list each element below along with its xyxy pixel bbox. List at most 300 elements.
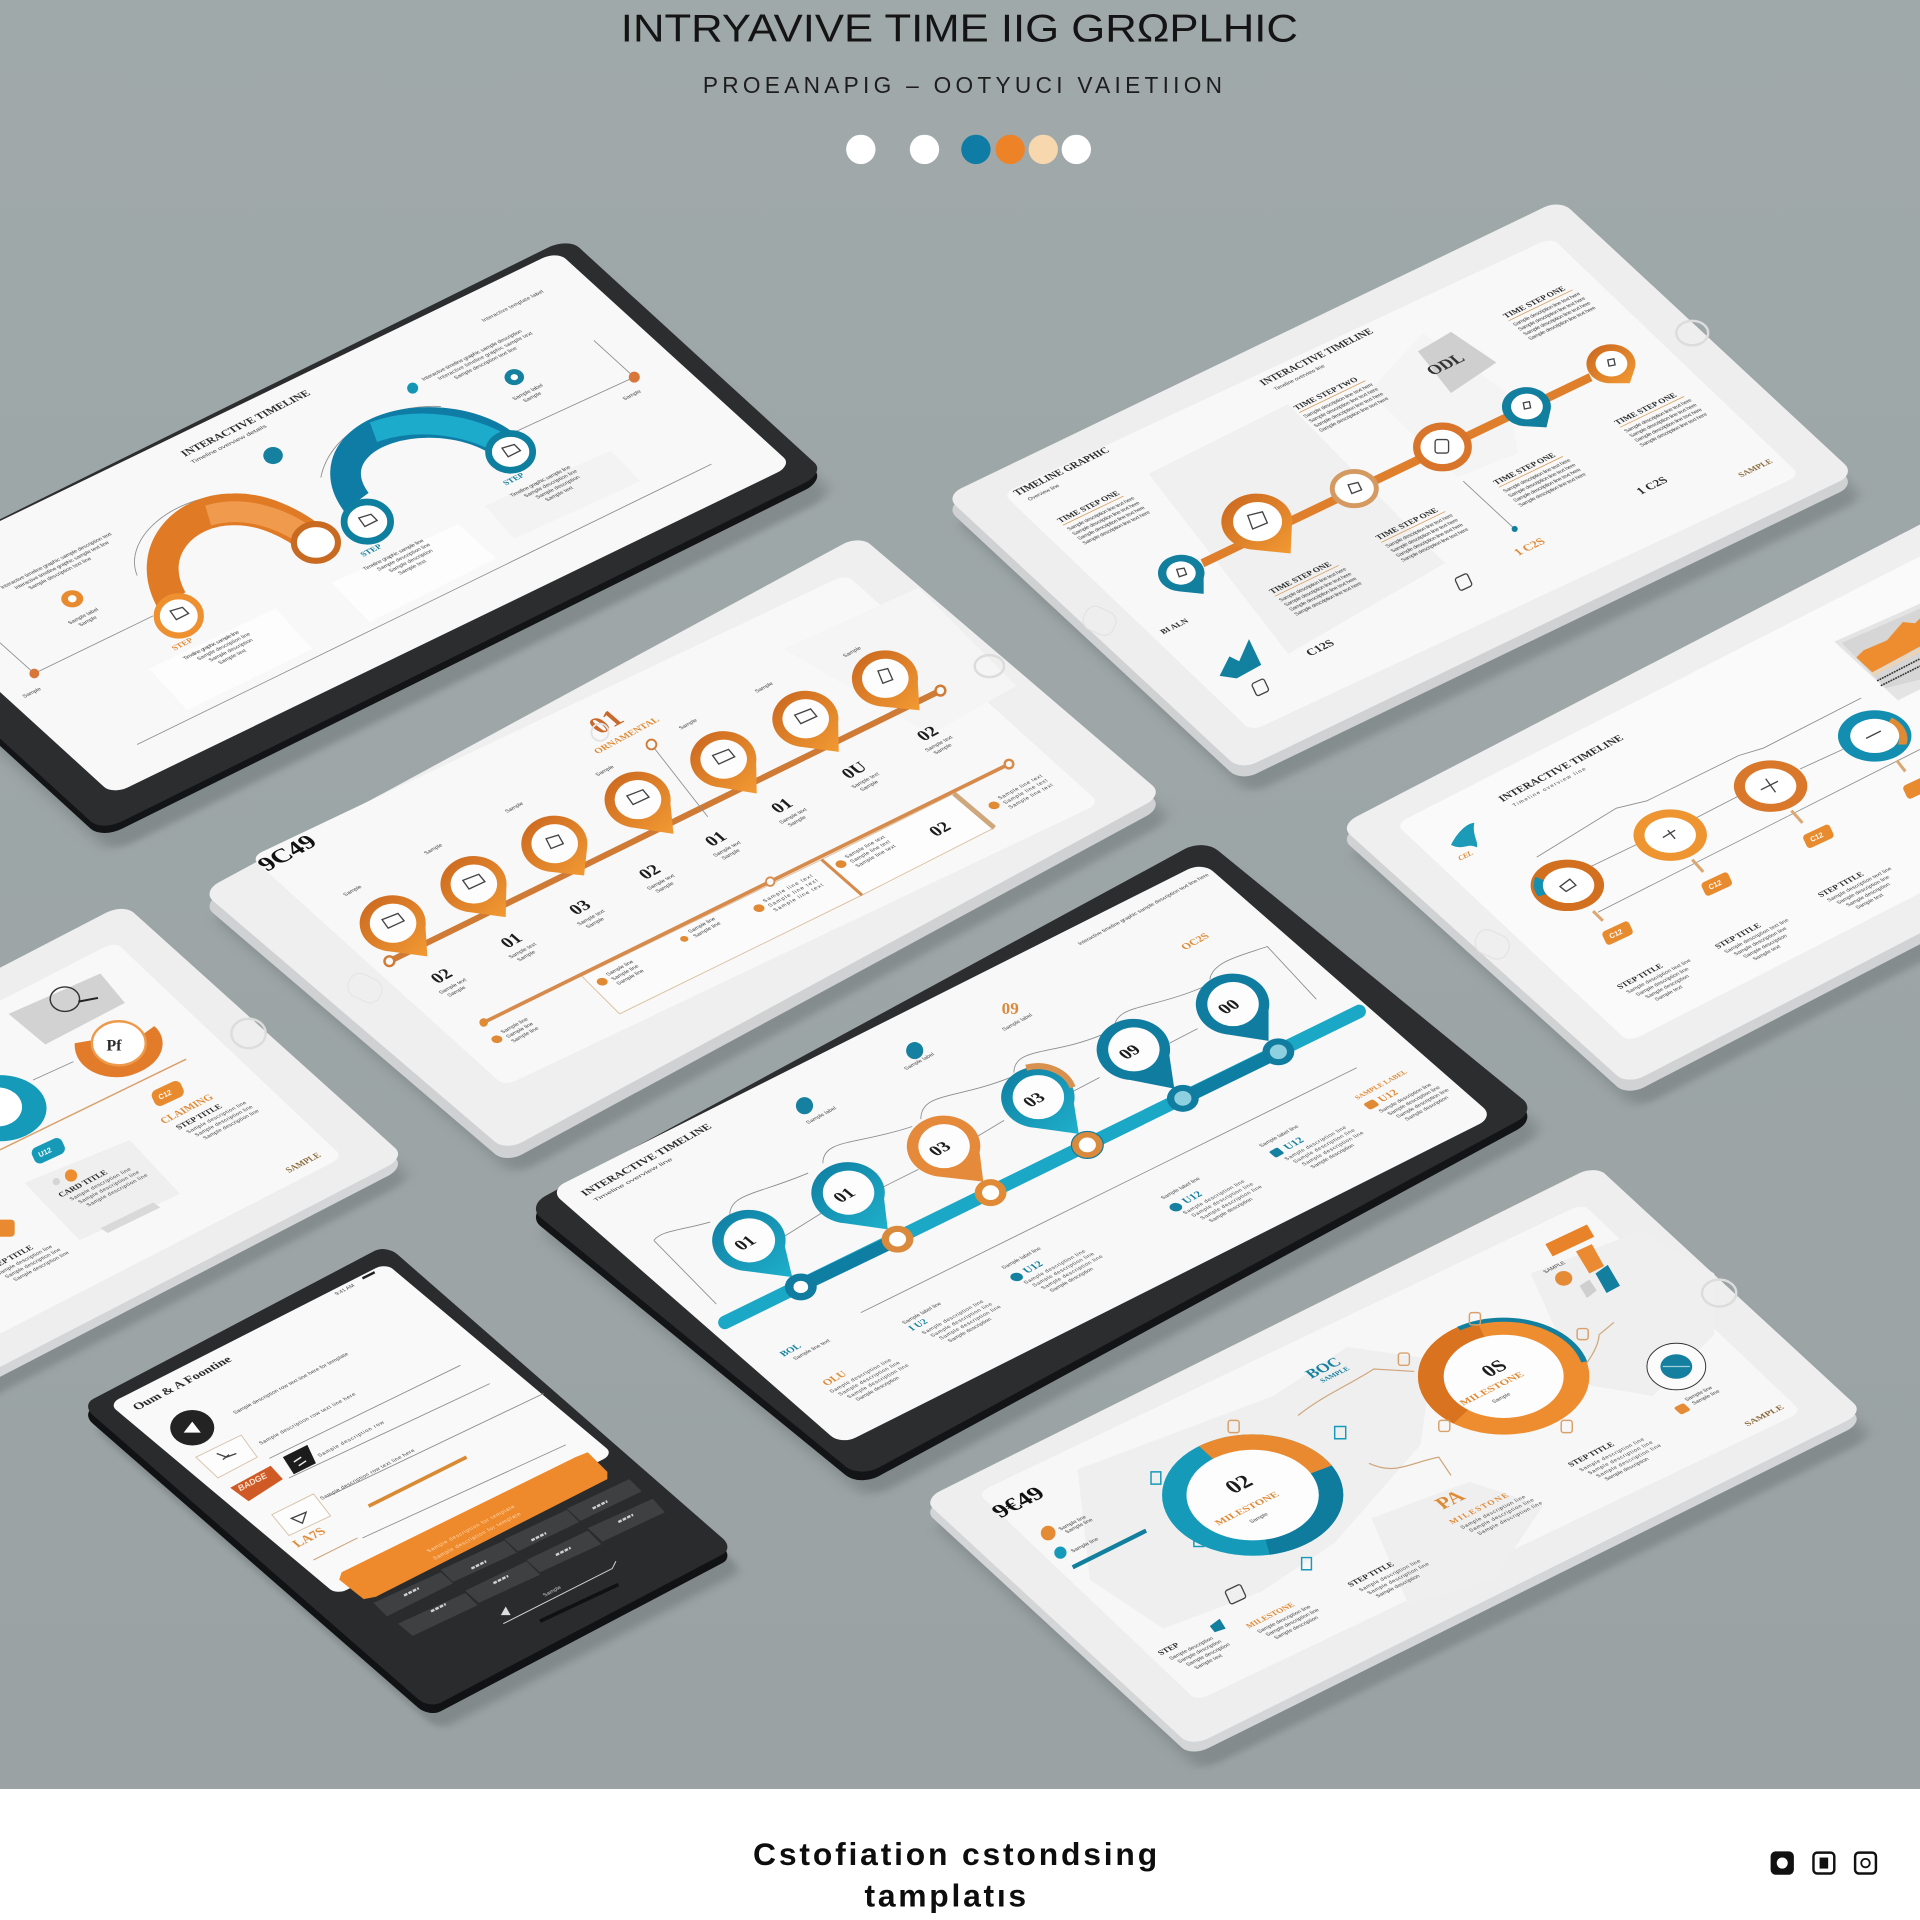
avatar <box>170 1410 214 1446</box>
captions: Sample <box>342 885 364 898</box>
teal icon <box>1451 823 1477 863</box>
box notes: Sample line text <box>849 839 893 864</box>
step numbers: 01 <box>700 828 731 849</box>
orange ring <box>75 1021 163 1077</box>
text blocks: PA <box>1431 1487 1470 1513</box>
text blocks: Sample description <box>1404 1096 1450 1122</box>
box notes: Sample line <box>692 921 723 939</box>
text blocks: Sample text <box>1654 985 1685 1002</box>
text blocks: Sample description <box>1049 1267 1095 1293</box>
orange icon and text: Sample description line <box>4 1248 63 1280</box>
orange progress line <box>369 1457 467 1506</box>
text blocks: Sample line <box>1684 1386 1714 1403</box>
text blocks: TIME STEP ONE <box>1501 285 1568 320</box>
subtitle: PROEANAPIG – OOTYUCI VAIETIION <box>703 72 1222 98</box>
text blocks: Sample description line text here <box>1507 463 1578 499</box>
text blocks: Sample description line text here <box>1066 496 1137 532</box>
captions: Sample text <box>924 735 955 753</box>
text blocks: Sample description line text here <box>1502 458 1572 494</box>
box notes: Sample line text <box>762 874 815 904</box>
teal arc <box>321 406 533 541</box>
heading: INTERACTIVE TIMELINE <box>178 388 313 459</box>
row text: Sample description row text line here <box>319 1448 417 1501</box>
footer caption <box>753 1836 1157 1914</box>
text blocks: Sample description <box>1644 974 1691 1000</box>
box notes: Sample line text <box>772 883 826 913</box>
list icons: LA7S <box>289 1525 329 1550</box>
emblem and title: 01 <box>582 705 631 739</box>
keyboard <box>373 1479 665 1636</box>
text blocks: Sample <box>622 389 643 402</box>
left list <box>1041 1514 1146 1567</box>
panel: centre dark tablet with teal pins <box>527 839 1547 1500</box>
captions: Sample <box>446 985 468 998</box>
text blocks: STEP <box>1156 1641 1181 1657</box>
step numbers: 01 <box>496 930 527 951</box>
orange icon and text <box>0 1220 71 1287</box>
box notes: Sample line <box>500 1017 530 1035</box>
box notes: Sample line text <box>767 878 820 908</box>
text blocks: Sample description text line <box>1625 958 1693 995</box>
text blocks: STEP TITLE <box>1346 1560 1396 1588</box>
step numbers: 02 <box>912 723 943 744</box>
text blocks: TIME STEP ONE <box>1267 560 1334 595</box>
text blocks: Sample description line <box>1587 1440 1655 1476</box>
phone title: Oum & A Foontine <box>129 1354 235 1413</box>
text blocks: Sample description line <box>1023 1249 1088 1286</box>
text blocks <box>778 1062 1456 1408</box>
text blocks: SAMPLE LABEL <box>1353 1069 1409 1101</box>
text blocks: Sample description line <box>846 1363 911 1400</box>
faint map <box>1078 1231 1714 1629</box>
left list: Sample line <box>1070 1537 1100 1554</box>
text blocks: Sample text <box>1752 944 1783 962</box>
text blocks: 1 C2S <box>1510 535 1549 558</box>
row text <box>232 1352 417 1501</box>
text blocks: Interactive timeline graphic sample description <box>421 329 524 382</box>
pins <box>1158 344 1635 594</box>
text blocks: Sample description line <box>929 1302 994 1338</box>
text blocks: Sample text <box>397 559 429 576</box>
text blocks: Sample description line <box>196 632 252 662</box>
text blocks: Sample description <box>1177 1639 1224 1665</box>
pills: C12 <box>1707 878 1723 892</box>
orange icon and text: Sample description line <box>12 1251 71 1283</box>
orange band: Sample description for template <box>426 1505 517 1554</box>
text blocks: Sample description line text here <box>1288 577 1359 612</box>
text blocks: Sample description line <box>1460 1495 1527 1530</box>
text blocks: STEP TITLE <box>1615 962 1665 991</box>
captions: Sample text <box>646 873 677 891</box>
list icons <box>196 1435 358 1560</box>
captions: Sample <box>842 646 863 659</box>
text blocks: Sample description line text here <box>1313 392 1385 429</box>
labels: U12 <box>37 1145 53 1159</box>
captions: Sample text <box>778 807 809 825</box>
text blocks: Sample <box>78 615 99 628</box>
captions: Sample text <box>712 840 743 858</box>
text blocks: Sample label line <box>1160 1177 1202 1201</box>
teal pins: 00 <box>1213 996 1244 1017</box>
text blocks: Sample description line <box>1836 875 1891 906</box>
grey note with badge: ODL <box>1422 350 1469 379</box>
headings: INTERACTIVE TIMELINE <box>1257 327 1376 388</box>
text blocks: Sample description text line <box>1723 918 1791 955</box>
panel: centre white tablet with orange pins <box>202 535 1173 1176</box>
captions: Sample text <box>508 942 539 960</box>
text blocks <box>1156 1354 1786 1677</box>
phone footer: Sample <box>542 1585 563 1598</box>
grey picture box with magnifier <box>9 973 125 1044</box>
text blocks: Sample description line <box>837 1361 902 1397</box>
step numbers: 02 <box>426 965 457 987</box>
heading: INTERACTIVE TIMELINE <box>578 1122 715 1198</box>
text blocks: U12 <box>1179 1189 1205 1206</box>
text blocks: Sample description line <box>1358 1559 1422 1593</box>
text blocks: Timeline graphic sample line <box>362 539 426 572</box>
teal pins: 01 <box>729 1232 761 1253</box>
box notes: Sample line <box>505 1022 535 1039</box>
connectors <box>1298 1322 1614 1476</box>
note block: Sample description line <box>185 1101 248 1135</box>
text blocks: Sample <box>22 687 43 699</box>
text blocks: Sample description line text here <box>1390 518 1460 554</box>
text blocks: U12 <box>1020 1259 1046 1276</box>
text blocks: Sample description line text here <box>1082 510 1152 546</box>
orange caption: OC2S <box>1178 931 1212 952</box>
area chart <box>1834 604 1920 700</box>
note block: Sample description line <box>194 1105 255 1138</box>
donut: step 02 <box>1174 1443 1331 1548</box>
text blocks: Sample description <box>947 1317 993 1344</box>
mini dial <box>1647 1343 1706 1390</box>
small square icons <box>1251 573 1473 696</box>
text blocks: Sample line <box>1691 1389 1722 1406</box>
text blocks: U12 <box>1281 1136 1307 1152</box>
text blocks: Sample description line text here <box>1639 412 1709 448</box>
pills <box>1601 774 1920 946</box>
panel: dark phone with keyboard <box>81 1245 744 1731</box>
icons and dots <box>29 369 640 678</box>
text blocks: Sample description line <box>1595 1443 1663 1479</box>
text blocks: TIME STEP ONE <box>1491 451 1558 486</box>
note card: CARD TITLE <box>56 1168 110 1199</box>
teal pins <box>712 974 1269 1277</box>
text blocks: Timeline graphic sample line <box>182 630 241 661</box>
text blocks: TIME STEP ONE <box>1613 391 1679 426</box>
timeline line <box>1202 377 1591 563</box>
text blocks: Sample description line <box>1395 1088 1451 1119</box>
captions: Sample text <box>851 772 881 790</box>
box notes: Sample line <box>610 964 641 982</box>
row text: Sample description row <box>317 1420 386 1458</box>
left list: Sample line <box>1064 1518 1095 1535</box>
orange band <box>339 1452 607 1599</box>
text blocks: Sample description text line <box>27 557 93 591</box>
heading: Timeline overview line <box>593 1157 675 1203</box>
text blocks: BI ALN <box>1158 617 1191 636</box>
text blocks: Sample description line text here <box>1308 387 1380 424</box>
text blocks: Sample description line <box>1256 1605 1313 1635</box>
box notes: Sample line <box>605 960 635 977</box>
text blocks: Sample description line text here <box>1395 523 1465 559</box>
grey note with badge <box>1418 332 1496 393</box>
captions: Sample <box>754 681 775 694</box>
captions: Sample <box>678 718 699 731</box>
text blocks: Sample description text line <box>1826 867 1893 903</box>
text blocks: C12S <box>1302 637 1338 658</box>
text blocks: Sample description line <box>1292 1128 1357 1165</box>
emblem and title: ORNAMENTAL <box>592 715 662 756</box>
row text: Sample description row text line here for template <box>232 1352 350 1416</box>
title: INTRYAVIVE TIME IIG GRΩPLHIC <box>621 8 1298 51</box>
row text: Sample description row text line here <box>258 1392 358 1446</box>
headings: Overview line <box>1027 484 1061 502</box>
step numbers: 03 <box>564 896 595 918</box>
text blocks: Sample description line text here <box>1076 506 1147 541</box>
teal band <box>725 1011 1359 1322</box>
text blocks: Interactive timeline graphic sample text <box>437 331 535 381</box>
text blocks: Sample description line <box>1468 1498 1536 1534</box>
panel: left white tablet cut off <box>0 904 413 1534</box>
teal pins: 01 <box>828 1185 860 1206</box>
text blocks: Sample description line <box>1578 1437 1646 1473</box>
text blocks: Sample description <box>1310 1143 1356 1170</box>
text blocks: Sample description line <box>1366 1562 1431 1596</box>
upper icons: Sample label <box>805 1106 838 1125</box>
captions: Sample <box>787 815 808 828</box>
teal ring <box>0 1075 47 1141</box>
donut: step 03: MILESTONE <box>1458 1370 1527 1408</box>
text blocks: Sample description line <box>1191 1182 1255 1218</box>
text blocks: SAMPLE <box>1742 1403 1786 1428</box>
teal pins: 03 <box>1018 1089 1049 1110</box>
text blocks: STEP TITLE <box>1566 1440 1617 1468</box>
text blocks: Sample description line <box>1182 1179 1247 1216</box>
text blocks: Sample description line <box>1265 1608 1321 1638</box>
text blocks: TIME STEP ONE <box>1374 506 1440 541</box>
text blocks: Sample description line text here <box>1283 572 1354 608</box>
pills: C12 <box>1608 927 1624 941</box>
step numbers: 0U <box>837 758 871 782</box>
text blocks: Sample description line text here <box>1512 292 1582 328</box>
text blocks: Sample description line <box>1199 1185 1264 1221</box>
orange pins <box>360 650 920 956</box>
text blocks: 1 C2S <box>1633 474 1671 497</box>
captions <box>342 646 960 1000</box>
orange arc <box>135 495 338 636</box>
small icons <box>1228 1313 1588 1433</box>
text blocks: Sample description line text here <box>1623 398 1694 434</box>
labels <box>30 1079 186 1166</box>
panel: bottom right white tablet with donut rings <box>923 1165 1873 1771</box>
heading: INTERACTIVE TIMELINE <box>1496 733 1626 804</box>
captions: Sample <box>933 743 954 756</box>
text blocks: Sample description line text here <box>1512 468 1583 503</box>
note block: Sample description line <box>202 1109 261 1141</box>
text blocks: Interactive timeline graphic sample description text <box>0 532 114 590</box>
donut: step 03: 0S <box>1477 1357 1512 1381</box>
text blocks: Sample description <box>1845 882 1892 908</box>
step numbers <box>426 723 955 987</box>
panel: right white tablet with rings <box>1340 476 1920 1109</box>
text blocks: Sample <box>522 391 543 404</box>
text blocks: Sample description line text here <box>1634 408 1704 443</box>
text blocks: I U2 <box>906 1317 931 1333</box>
donut: step 02: 02 <box>1219 1471 1258 1497</box>
list icons: BADGE <box>236 1470 269 1493</box>
text blocks: Timeline graphic sample line <box>509 465 573 498</box>
box notes: Sample line <box>510 1026 541 1044</box>
text blocks: Sample description line text here <box>1071 501 1142 537</box>
captions: Sample <box>595 765 616 778</box>
rows <box>269 1365 566 1538</box>
text blocks: Sample description <box>1208 1197 1255 1224</box>
captions: Sample text <box>576 909 607 927</box>
panel: white tablet with timeline <box>945 200 1865 795</box>
footer caption: tamplatıs <box>864 1878 1026 1914</box>
status <box>334 1272 375 1297</box>
text blocks <box>1615 859 1909 1010</box>
text blocks: STEP TITLE <box>1816 870 1866 899</box>
text blocks: Sample description line text here <box>1400 527 1470 563</box>
keyboard glyphs <box>404 1501 633 1611</box>
text blocks: Sample label line <box>1258 1124 1300 1149</box>
headings: Timeline overview line <box>1273 364 1327 392</box>
teal small icons <box>1151 1427 1346 1632</box>
upper icons: 09 <box>1002 999 1019 1018</box>
text blocks: TIME STEP TWO <box>1292 376 1361 412</box>
text blocks: Sample text <box>1855 893 1886 911</box>
text blocks: Sample label line <box>901 1301 943 1326</box>
text blocks: STEP TITLE <box>1713 922 1763 950</box>
text blocks: Sample description line <box>523 469 579 499</box>
text blocks: Sample description line <box>1284 1125 1348 1162</box>
upper icons <box>796 999 1034 1125</box>
text blocks: Sample description line <box>376 543 432 572</box>
text blocks: BOL <box>778 1342 804 1359</box>
text blocks: Sample description line text here <box>1278 567 1348 603</box>
phone footer <box>501 1561 618 1624</box>
captions: Sample <box>423 843 444 856</box>
text blocks: Sample description line <box>1386 1085 1442 1117</box>
step numbers: 01 <box>766 795 797 816</box>
upper icons: Sample label <box>1001 1013 1034 1032</box>
upper icons: Sample label <box>903 1052 936 1071</box>
box notes: Sample line text <box>997 774 1045 801</box>
box notes: Sample line text <box>844 835 887 860</box>
status: 9:41 AM <box>334 1283 357 1297</box>
text blocks: Sample description line <box>1378 1083 1434 1114</box>
text blocks: U12 <box>1375 1088 1401 1104</box>
text blocks: Sample description line <box>1031 1252 1096 1288</box>
text blocks: Sample description line text here <box>1628 403 1699 439</box>
bars chart <box>1542 1224 1620 1298</box>
box notes <box>488 774 1055 1050</box>
top-right caption: Interactive timeline graphic sample description text line here <box>1077 873 1211 947</box>
text blocks: TIME STEP ONE <box>1055 489 1122 524</box>
box notes: Sample line text <box>854 844 898 869</box>
captions: Sample <box>504 801 525 814</box>
text blocks: Sample description line text here <box>1293 581 1364 617</box>
text blocks: BOC <box>1302 1355 1345 1381</box>
box notes: Sample line <box>616 969 646 986</box>
labels: C12 <box>157 1088 173 1102</box>
emblem and title <box>582 705 662 756</box>
captions: Sample <box>516 950 537 963</box>
text blocks: Sample text <box>1193 1653 1225 1671</box>
text blocks: STEP <box>170 636 195 652</box>
text blocks: SAMPLE <box>1736 457 1775 479</box>
teal pins: 09 <box>1114 1041 1145 1062</box>
text blocks: SAMPLE <box>1318 1365 1352 1384</box>
logo: SAMPLE <box>283 1151 324 1175</box>
teal pins: 03 <box>924 1138 955 1159</box>
text blocks: Sample description <box>855 1376 901 1402</box>
heading: Timeline overview line <box>1512 767 1588 808</box>
footer caption: Cstofiation cstondsing <box>753 1836 1157 1872</box>
note card: Sample description line <box>86 1173 150 1208</box>
text blocks <box>1055 282 1775 658</box>
text blocks: STEP <box>358 543 384 558</box>
headings: TIMELINE GRAPHIC <box>1011 445 1112 498</box>
donut: step 03 <box>1420 1320 1587 1433</box>
text blocks: Sample description line <box>921 1299 986 1336</box>
bars chart: SAMPLE <box>1542 1261 1567 1275</box>
timeline lines <box>384 686 1013 1027</box>
box notes: Sample line text <box>1002 778 1050 806</box>
captions: Sample <box>655 881 676 894</box>
band nodes <box>785 1038 1294 1300</box>
note card <box>24 1140 180 1240</box>
note card: Sample description line <box>69 1167 133 1202</box>
pills: C12 <box>1809 830 1825 844</box>
text blocks: Sample description line text here <box>1527 306 1598 342</box>
text blocks: Sample label <box>67 607 100 626</box>
donut: step 02: Sample <box>1249 1512 1270 1525</box>
captions: Sample text <box>438 977 469 996</box>
text blocks: Sample description line text here <box>1517 296 1587 332</box>
text blocks: Sample description <box>1604 1457 1651 1482</box>
text blocks: Sample description <box>1273 1615 1320 1641</box>
panel: dark tablet with arcs <box>0 238 835 853</box>
text blocks: Sample description line <box>938 1305 1003 1341</box>
text blocks: Sample description <box>208 638 255 663</box>
text blocks: Sample description line <box>1301 1131 1366 1167</box>
text blocks: Sample text <box>544 485 575 503</box>
text blocks: Sample description line text here <box>1302 382 1375 419</box>
headings <box>1011 327 1383 504</box>
box notes: Sample line <box>687 917 717 935</box>
captions: Sample <box>585 917 606 930</box>
logo: 9C49 <box>252 831 323 876</box>
text blocks: Sample description <box>1742 934 1789 960</box>
captions: Sample <box>721 848 742 861</box>
captions: Sample <box>859 780 880 793</box>
text blocks: Sample label line <box>1001 1246 1043 1271</box>
text blocks: Sample description line text here <box>1384 513 1455 549</box>
footer social icons <box>1771 1851 1876 1875</box>
note block <box>158 1082 261 1149</box>
left list: Sample line <box>1058 1515 1088 1532</box>
orange ring: Pf <box>107 1038 122 1055</box>
note block: STEP TITLE <box>174 1102 224 1131</box>
text blocks: Sample description line <box>1733 926 1789 957</box>
text blocks: MILESTONE <box>1447 1491 1511 1526</box>
logo: 9€49 <box>986 1482 1050 1522</box>
text blocks: Sample description line text here <box>1517 472 1588 508</box>
text blocks: Interactive timeline graphic sample text line <box>13 540 111 591</box>
